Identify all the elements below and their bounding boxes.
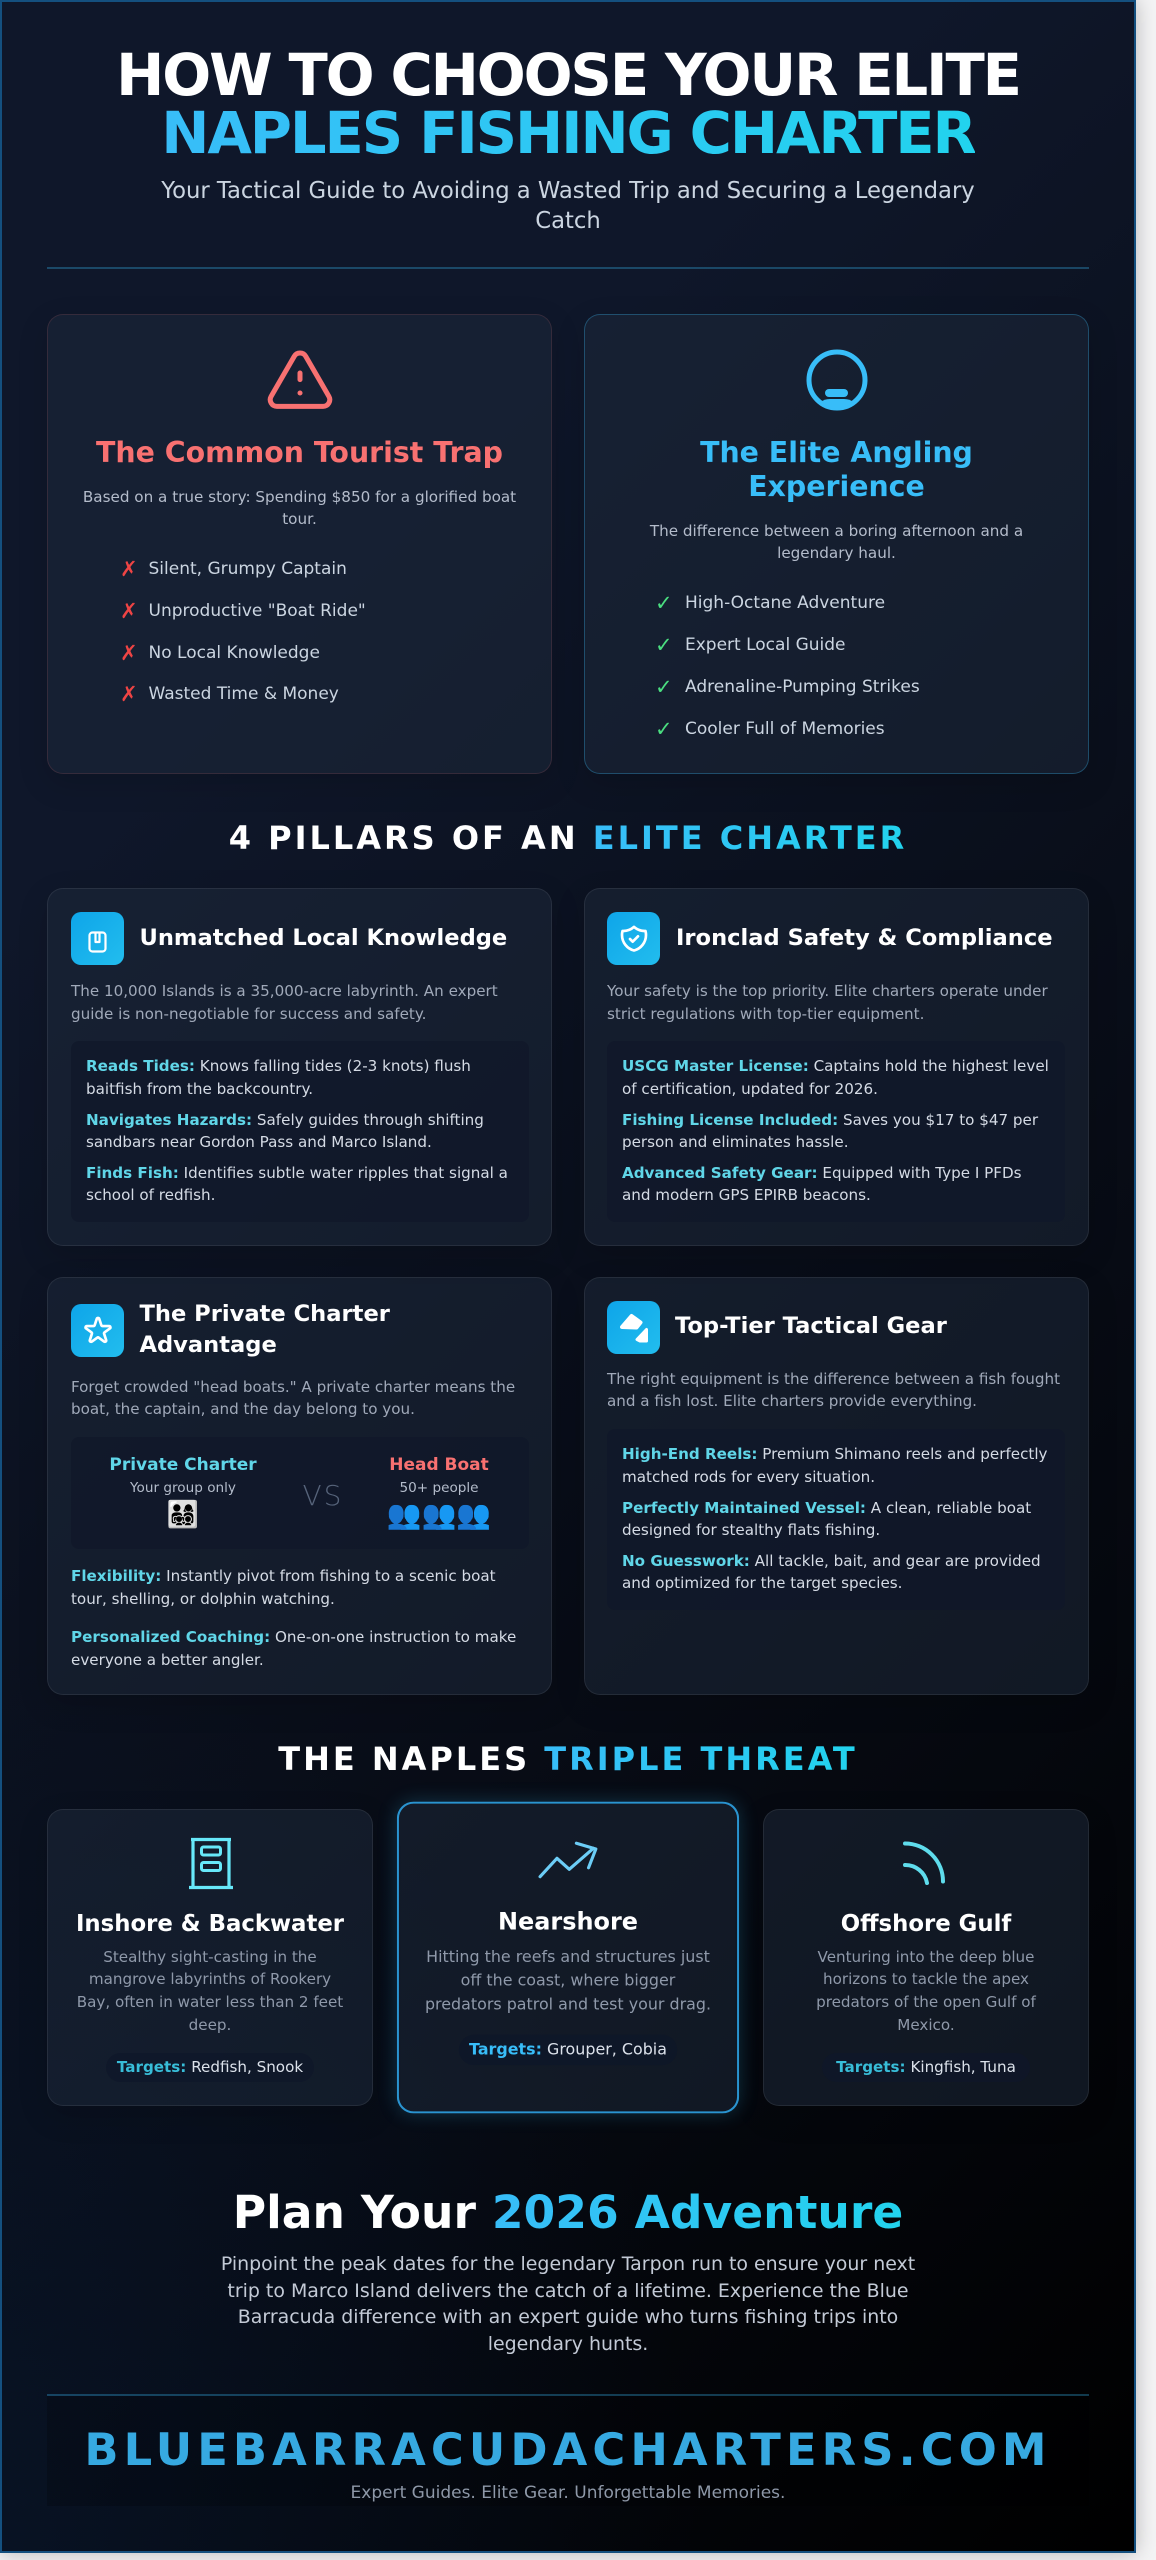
panel: elite angling experience [584,314,1089,774]
private charter column: Your group only [130,1480,236,1496]
description: Mexico. [897,2016,955,2034]
description: Based on a true story: Spending $850 for a glorified boat [83,488,516,506]
section heading: triple threat: THE NAPLES TRIPLE THREAT [278,1740,858,1778]
details box: Fishing License Included: Saves you $17 to $47 per [622,1110,1038,1128]
call to action text [221,2253,915,2354]
heading: The Common Tourist Trap [96,436,503,469]
icon: star [71,1304,124,1357]
VS label: VS [303,1479,343,1512]
heading: Unmatched Local Knowledge [140,925,507,951]
details box: and optimized for the target species. [622,1574,902,1592]
details box: No Guesswork: All tackle, bait, and gear are provided [622,1552,1041,1570]
call to action heading: Plan Your 2026 Adventure [233,2186,903,2239]
description: horizons to tackle the apex [823,1970,1029,1988]
heading: Advantage [140,1332,277,1358]
targets pill: Targets: Kingfish, Tuna [836,2058,1016,2076]
description [71,1378,515,1418]
call to action text: trip to Marco Island delivers the catch of a lifetime. Experience the Blue [227,2280,909,2302]
details box: Perfectly Maintained Vessel: A clean, reliable boat [622,1498,1031,1516]
description: Venturing into the deep blue [818,1948,1034,1966]
description [816,1948,1036,2034]
description: Forget crowded "head boats." A private charter means the [71,1378,515,1396]
details box: baitfish from the backcountry. [86,1080,313,1098]
description: tour. [282,510,317,528]
description: Bay, often in water less than 2 feet [77,1993,343,2011]
private charter column [109,1455,257,1530]
list: negatives: Unproductive "Boat Ride" [148,601,366,621]
list: negatives: ✗ [120,599,138,623]
heading: Nearshore [498,1909,638,1936]
head boat column: 50+ people [399,1480,479,1496]
icon: building [189,1838,233,1890]
website url: BLUEBARRACUDACHARTERS.COM [84,2422,1052,2476]
list: negatives: Wasted Time & Money [148,684,339,704]
details box [607,1041,1065,1222]
description: The difference between a boring afternoon and a [650,522,1023,540]
description: Hitting the reefs and structures just [426,1947,710,1966]
targets pill: Targets: Redfish, Snook [117,2058,303,2076]
call to action text: legendary hunts. [488,2332,648,2354]
description [77,1948,343,2034]
list: positives: Adrenaline-Pumping Strikes [685,677,920,697]
section heading: pillars: 4 PILLARS OF AN ELITE CHARTER [229,819,907,857]
description: deep. [189,2016,231,2034]
description [650,522,1023,562]
title: HOW TO CHOOSE YOUR ELITE [116,42,1020,109]
title: NAPLES FISHING CHARTER [161,100,975,167]
description: strict regulations with top-tier equipment. [607,1005,924,1023]
panel: private charter advantage [47,1277,552,1695]
details box: High-End Reels: Premium Shimano reels and perfectly [622,1445,1048,1463]
tagline: Expert Guides. Elite Gear. Unforgettable Memories. [351,2482,785,2502]
details box: designed for stealthy flats fishing. [622,1521,880,1539]
heading: Inshore & Backwater [76,1911,344,1937]
heading: Ironclad Safety & Compliance [676,925,1053,951]
panel: inshore [47,1809,373,2106]
list: negatives: ✗ [120,682,138,706]
panel: common tourist trap [47,314,552,774]
description: guide is non-negotiable for success and safety. [71,1005,426,1023]
list: negatives: No Local Knowledge [148,643,320,663]
list: positives: ✓ [655,633,673,657]
heading: The Elite Angling [700,436,973,469]
subtitle [161,178,975,234]
subtitle: Catch [535,208,601,234]
icon: gear shapes [607,1301,660,1354]
call to action text: Pinpoint the peak dates for the legendary Tarpon run to ensure your next [221,2253,915,2275]
targets pill [106,2053,314,2082]
details box [607,1429,1065,1610]
bullet: coaching [71,1628,516,1669]
footer [47,2396,1089,2506]
icon: shield [607,912,660,965]
details box: of certification, updated for 2026. [622,1080,878,1098]
head boat column [387,1455,491,1531]
bullet: coaching: Personalized Coaching: One-on-one instruction to make [71,1628,516,1646]
heading [140,1301,390,1358]
list: positives: ✓ [655,675,673,699]
details box: school of redfish. [86,1186,215,1204]
heading: Offshore Gulf [841,1911,1011,1937]
details box: sandbars near Gordon Pass and Marco Island. [86,1133,432,1151]
icon: signal arcs [903,1842,945,1885]
details box: Reads Tides: Knows falling tides (2-3 knots) flush [86,1057,471,1075]
head boat column: Head Boat [389,1455,489,1475]
description [425,1947,711,2014]
description [607,982,1048,1023]
targets pill: Targets: Grouper, Cobia [469,2039,667,2058]
list: negatives [120,557,366,706]
list: negatives: ✗ [120,557,138,581]
list: positives [655,591,920,741]
description [70,982,498,1023]
description: Stealthy sight-casting in the [103,1948,317,1966]
heading: The Private Charter [140,1301,390,1327]
description: boat, the captain, and the day belong to you. [71,1400,415,1418]
icon: book [71,912,124,965]
details box: and modern GPS EPIRB beacons. [622,1186,871,1204]
bullet: flexibility: tour, shelling, or dolphin watching. [71,1590,335,1608]
list: positives: Cooler Full of Memories [685,719,885,739]
icon: captain circle [806,350,868,410]
description [83,488,516,528]
description [606,1370,1060,1410]
panel: tactical gear [584,1277,1089,1695]
description: The right equipment is the difference between a fish fought [607,1370,1060,1388]
panel: unmatched local knowledge [47,888,552,1246]
list: positives: Expert Local Guide [685,635,846,655]
targets pill [822,2053,1030,2082]
description: The 10,000 Islands is a 35,000-acre labyrinth. An expert [71,982,498,1000]
subtitle: Your Tactical Guide to Avoiding a Wasted Trip and Securing a Legendary [161,178,975,204]
details box: person and eliminates hassle. [622,1133,849,1151]
description: off the coast, where bigger [461,1971,675,1990]
list: negatives: ✗ [120,641,138,665]
private charter column: 👨‍👩‍👧‍👦 [167,1500,199,1530]
icon: warning triangle [268,350,332,409]
private charter column: Private Charter [109,1455,257,1475]
list: positives: ✓ [655,717,673,741]
panel: nearshore [397,1802,739,2113]
panel: ironclad safety [584,888,1089,1246]
call to action text: Barracuda difference with an expert guide who turns fishing trips into [238,2306,898,2328]
list: positives: ✓ [655,591,673,615]
description: mangrove labyrinths of Rookery [89,1970,331,1988]
details box: Finds Fish: Identifies subtle water ripples that signal a [86,1164,508,1182]
panel: offshore [763,1809,1089,2106]
list: positives: High-Octane Adventure [685,593,885,613]
details box [71,1041,529,1222]
comparison box [71,1437,529,1549]
heading: Experience [748,470,925,503]
list: negatives: Silent, Grumpy Captain [148,559,347,579]
bullet: coaching: everyone a better angler. [71,1651,264,1669]
icon: trend arrow [538,1842,598,1878]
description: legendary haul. [777,544,896,562]
details box: Advanced Safety Gear: Equipped with Type I PFDs [622,1164,1022,1182]
details box: matched rods for every situation. [622,1468,875,1486]
bullet: flexibility [71,1567,496,1608]
description: predators patrol and test your drag. [425,1995,711,2014]
bullet: flexibility: Flexibility: Instantly pivot from fishing to a scenic boat [71,1567,496,1585]
description: predators of the open Gulf of [816,1993,1036,2011]
title [116,42,1020,167]
description: Your safety is the top priority. Elite charters operate under [607,982,1048,1000]
targets pill [459,2034,677,2065]
head boat column: 👥👥👥 [387,1498,491,1531]
heading [700,436,973,503]
heading: Top-Tier Tactical Gear [675,1313,947,1339]
details box: Navigates Hazards: Safely guides through shifting [86,1110,484,1128]
description: and a fish lost. Elite charters provide everything. [607,1392,977,1410]
details box: USCG Master License: Captains hold the highest level [622,1057,1049,1075]
